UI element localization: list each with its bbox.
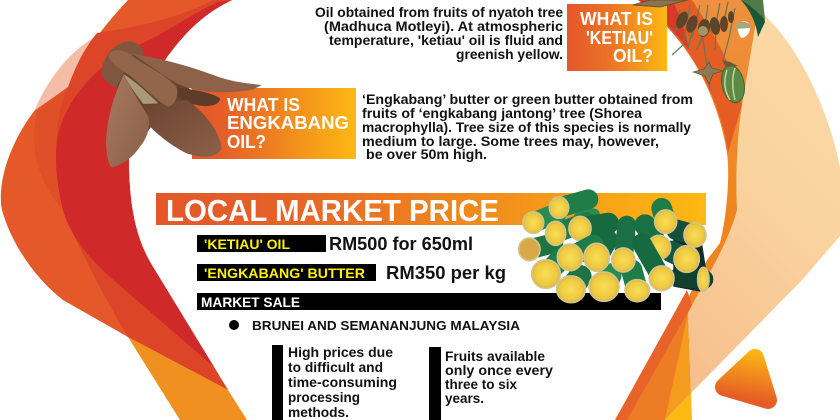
price row: engkabang butter [197, 263, 506, 283]
text block: engkabang butter description: macrophylla). Tree size of this species is normally [362, 119, 691, 135]
note: fruit availability [429, 347, 553, 420]
illustration: bamboo tubes of engkabang butter [519, 197, 709, 303]
text block: engkabang butter description: be over 50m high. [366, 146, 487, 162]
text block: ketiau oil description: (Madhuca Motleyi). At atmospheric [324, 18, 563, 34]
note: high prices: processing [288, 389, 360, 405]
text block: engkabang butter description: medium to large. Some trees may, however, [362, 133, 659, 149]
heading box: what is ketiau oil: 'KETIAU' [586, 27, 653, 48]
price row: ketiau oil: RM500 for 650ml [329, 234, 473, 254]
illustration: engkabang fruit [102, 41, 262, 167]
note: high prices [272, 344, 397, 420]
text block: engkabang butter description: ‘Engkabang’ butter or green butter obtained from [362, 91, 693, 107]
note: fruit availability: Fruits available [445, 348, 545, 364]
note: fruit availability: three to six [445, 376, 517, 392]
heading box: what is ketiau oil [567, 4, 667, 71]
heading box: what is engkabang oil: WHAT IS [227, 94, 300, 115]
note: fruit availability: years. [445, 390, 484, 406]
heading bar: market sale [197, 293, 661, 310]
price row: ketiau oil [197, 234, 473, 254]
heading box: what is engkabang oil: OIL? [227, 131, 266, 152]
text block: ketiau oil description: greenish yellow. [456, 46, 563, 62]
price row: engkabang butter: RM350 per kg [386, 263, 506, 283]
note: high prices: time-consuming [288, 374, 397, 390]
banner: local market price [156, 193, 706, 228]
heading bar: market sale: MARKET SALE [201, 294, 300, 310]
price row: engkabang butter: 'ENGKABANG' BUTTER [204, 265, 365, 281]
heading box: what is engkabang oil [192, 88, 356, 159]
note: high prices: High prices due [288, 344, 393, 360]
text block: engkabang butter description: fruits of ‘engkabang jantong’ tree (Shorea [362, 105, 642, 121]
heading box: what is ketiau oil: OIL? [613, 45, 653, 66]
note: high prices: to difficult and [288, 359, 383, 375]
illustration: nyatoh plant [633, 0, 765, 105]
icon: rounded triangle [724, 358, 768, 400]
text block: engkabang butter description [362, 91, 693, 162]
note: high prices: methods. [288, 404, 349, 420]
market: brunei and semananjung malaysia: BRUNEI AND SEMANANJUNG MALAYSIA [252, 319, 520, 333]
text block: ketiau oil description: temperature, 'ketiau' oil is fluid and [329, 32, 563, 48]
text block: ketiau oil description: Oil obtained from fruits of nyatoh tree [315, 4, 563, 20]
left ribbon shape [1, 0, 247, 420]
heading box: what is ketiau oil: WHAT IS [580, 8, 653, 29]
right ribbon shape [615, 0, 840, 420]
text block: ketiau oil description [315, 4, 563, 62]
heading box: what is engkabang oil: ENGKABANG [227, 112, 349, 133]
banner: local market price: LOCAL MARKET PRICE [166, 193, 499, 228]
note: fruit availability: only once every [445, 362, 553, 378]
price row: ketiau oil: 'KETIAU' OIL [204, 236, 290, 252]
